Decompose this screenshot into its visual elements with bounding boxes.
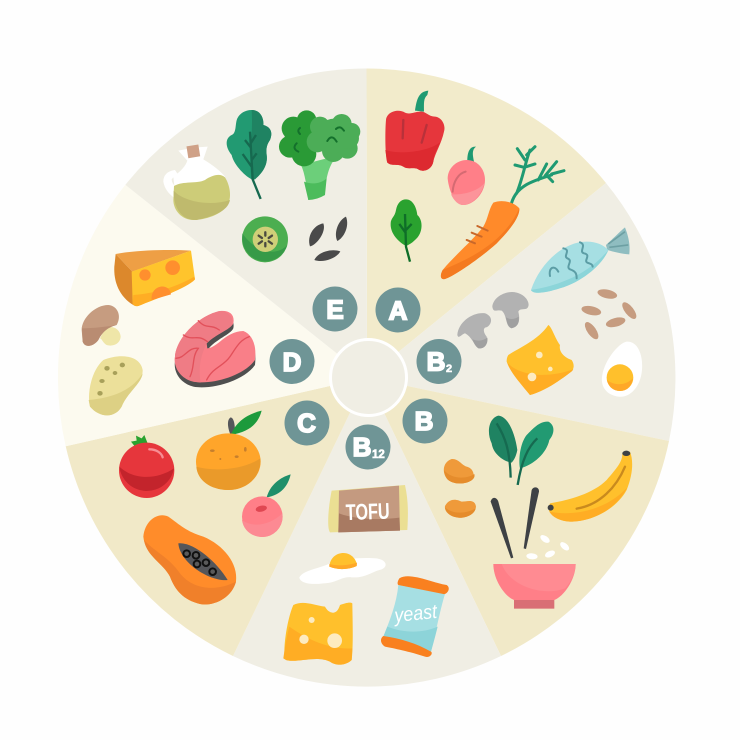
badge: vitamin B2 [416, 339, 462, 384]
badge: vitamin A [376, 288, 420, 332]
icon: rice bowl [493, 533, 576, 609]
icon: tofu package: TOFU [345, 498, 390, 525]
icon: fried egg [299, 553, 386, 584]
icon: potato [89, 356, 143, 415]
badge: vitamin E [312, 286, 358, 332]
panel: vitamin B wedge [367, 378, 669, 656]
icon: yeast packet [381, 576, 449, 657]
icon: almonds [581, 288, 639, 341]
icon: swiss cheese [283, 603, 353, 665]
icon: tofu package [328, 485, 408, 532]
icon: boiled egg [602, 342, 642, 397]
icon: pomegranate [119, 435, 174, 498]
panel: vitamin C wedge [66, 378, 367, 656]
badge: vitamin E: E [326, 294, 344, 324]
icon: banana [548, 451, 632, 522]
badge: vitamin C [284, 400, 330, 446]
panel: vitamin D wedge [58, 185, 367, 446]
icon: orange [196, 411, 262, 490]
badge: vitamin B12: B [353, 432, 371, 462]
icon: peach [242, 474, 291, 537]
badge: vitamin B: B [415, 406, 433, 436]
icon: chopsticks [491, 487, 539, 558]
badge: vitamin B [402, 398, 448, 444]
icon: cucumber slice [242, 216, 288, 262]
icon: yeast packet: yeast [392, 601, 439, 627]
icon: olive oil bottle [163, 144, 230, 220]
panel: vitamin E wedge [125, 68, 367, 378]
panel: vitamin B12 wedge [233, 378, 501, 687]
badge: vitamin B12 [346, 424, 390, 470]
icon: beans [444, 459, 476, 518]
badge: vitamin B2: B [427, 346, 445, 376]
badge: vitamin C: C [297, 408, 316, 438]
icon: carrot [441, 147, 564, 279]
badge: vitamin D [270, 339, 314, 384]
icon: mushrooms [457, 292, 529, 348]
icon: salmon steak [175, 311, 255, 387]
icon: brown mushroom [82, 305, 121, 346]
badge: vitamin B2: 2 [446, 363, 452, 375]
icon: red bell pepper [385, 91, 444, 171]
icon: broccoli [279, 110, 360, 200]
panel: vitamin B2 wedge [367, 183, 675, 441]
icon: cheese slice [507, 325, 574, 395]
icon: spinach leaf [227, 110, 271, 199]
badge: vitamin A: A [389, 296, 408, 326]
center hub circle [330, 340, 406, 416]
icon: spinach leaf small [391, 199, 422, 262]
icon: wedge of cheese [114, 250, 195, 306]
icon: radish [448, 147, 485, 205]
icon: fish [531, 227, 630, 293]
icon: leafy greens [489, 416, 553, 485]
icon: papaya [143, 515, 236, 604]
badge: vitamin D: D [283, 347, 301, 377]
badge: vitamin B12: 12 [372, 449, 385, 461]
icon: sunflower seeds [309, 217, 347, 261]
panel: vitamin A wedge [366, 68, 606, 378]
